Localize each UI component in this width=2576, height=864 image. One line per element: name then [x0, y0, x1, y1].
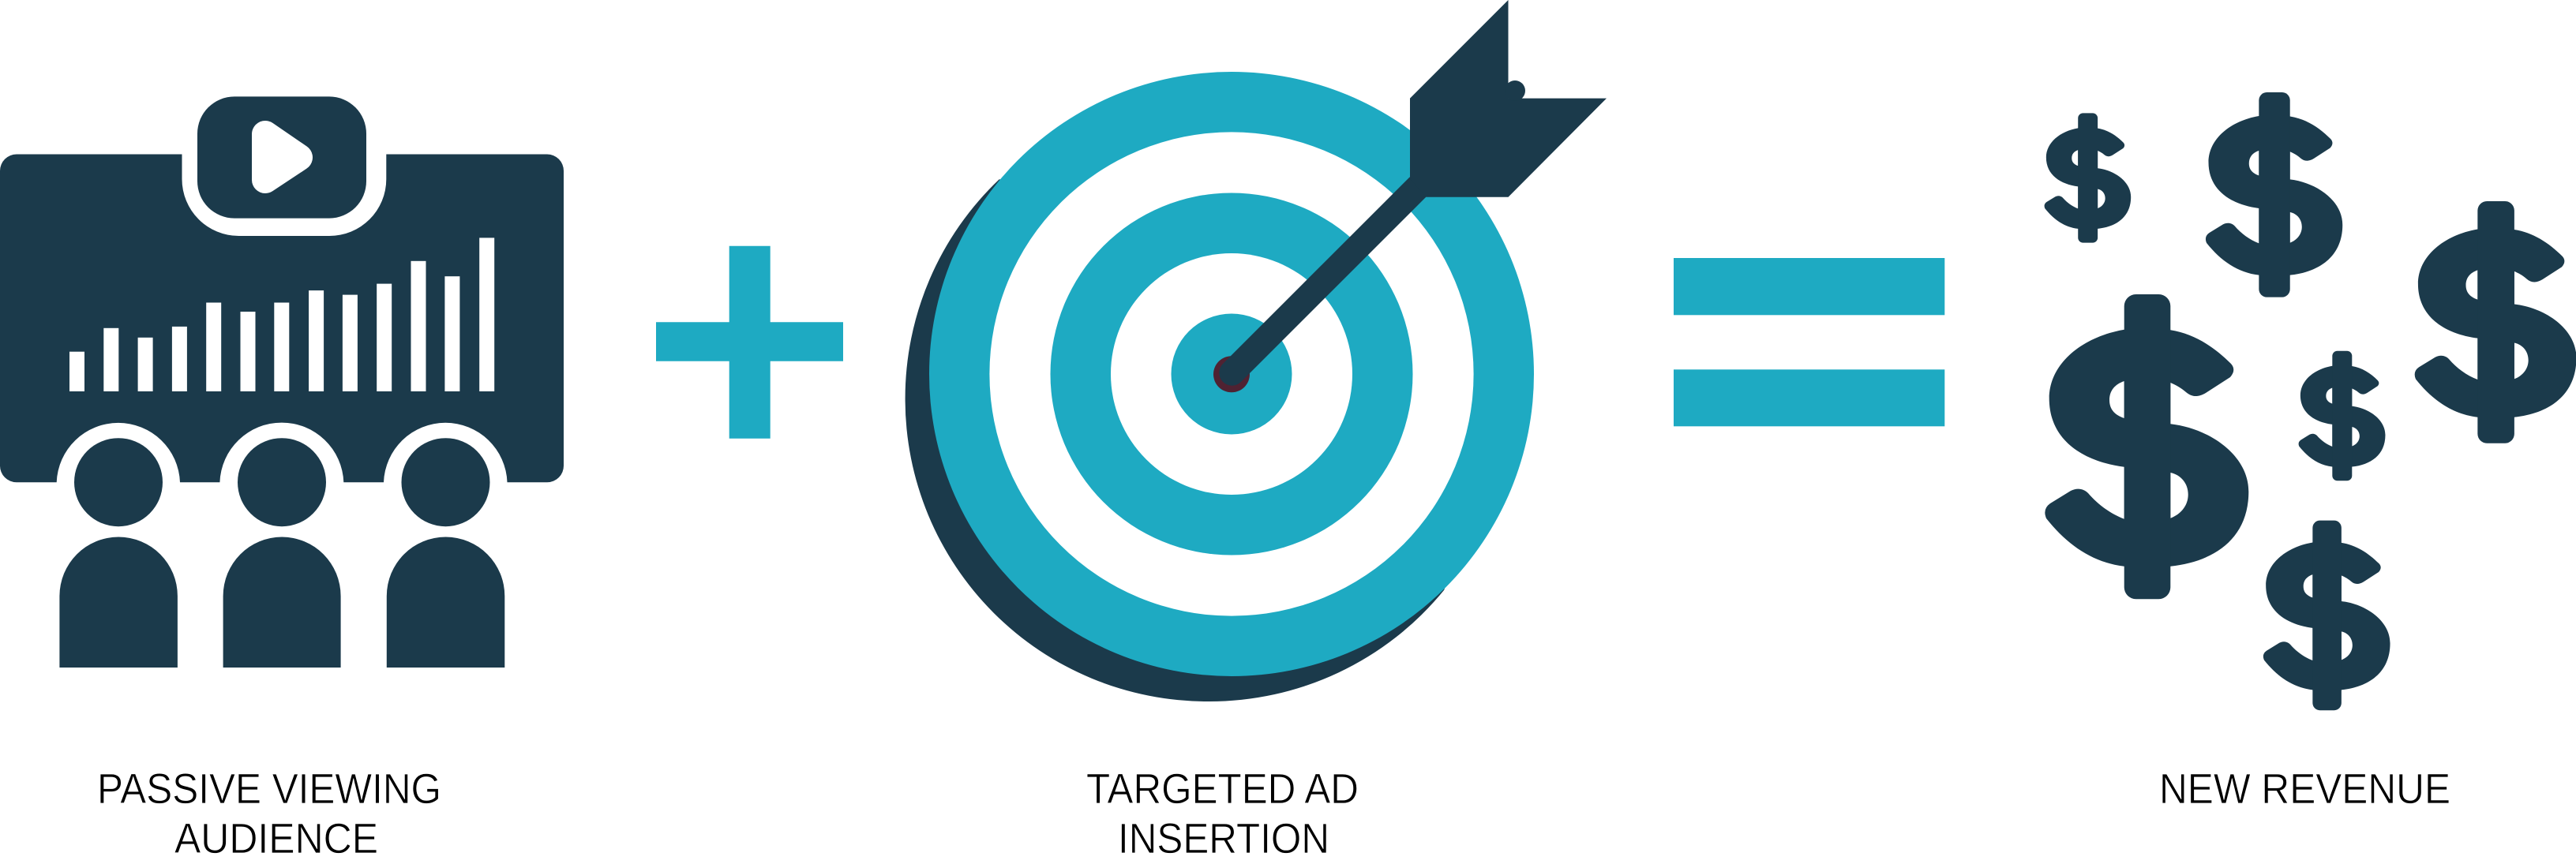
medium dollar sign bottom: [2263, 521, 2390, 710]
medium dollar sign top: [2206, 92, 2342, 297]
target shadow: [906, 179, 1445, 701]
label: passive viewing audience: [97, 765, 441, 862]
label: targeted ad insertion: [1086, 765, 1359, 862]
panel: passive viewing audience: [0, 96, 564, 862]
video player box: [197, 96, 366, 219]
screen with cutouts: [0, 155, 564, 482]
arrow fletching: [1410, 0, 1607, 197]
large dollar sign: [2045, 294, 2248, 599]
target rings: [929, 72, 1534, 676]
small dollar sign top left: [2045, 113, 2131, 243]
bar chart: [69, 238, 494, 391]
icon: equals sign: [1674, 258, 1944, 426]
icon: dollar signs: [2045, 92, 2576, 710]
panel: targeted ad insertion: [906, 0, 1607, 862]
label: new revenue: NEW REVENUE: [2159, 765, 2450, 813]
label: targeted ad insertion: TARGETED AD: [1086, 765, 1359, 813]
label: passive viewing audience: PASSIVE VIEWING: [97, 765, 441, 813]
icon: audience watching screen: [0, 96, 564, 668]
icon: target with arrow: [906, 0, 1607, 701]
person 3: [387, 438, 504, 668]
person 2: [223, 438, 341, 668]
icon: play triangle: [265, 134, 299, 180]
panel: new revenue: [2045, 92, 2576, 813]
icon: plus sign: [656, 246, 843, 439]
small dollar sign centre: [2299, 351, 2385, 481]
label: passive viewing audience: AUDIENCE: [174, 815, 378, 862]
person 1: [59, 438, 178, 668]
label: targeted ad insertion: INSERTION: [1118, 815, 1329, 862]
large dollar sign right: [2415, 201, 2576, 443]
arrow shaft: [1232, 187, 1418, 372]
